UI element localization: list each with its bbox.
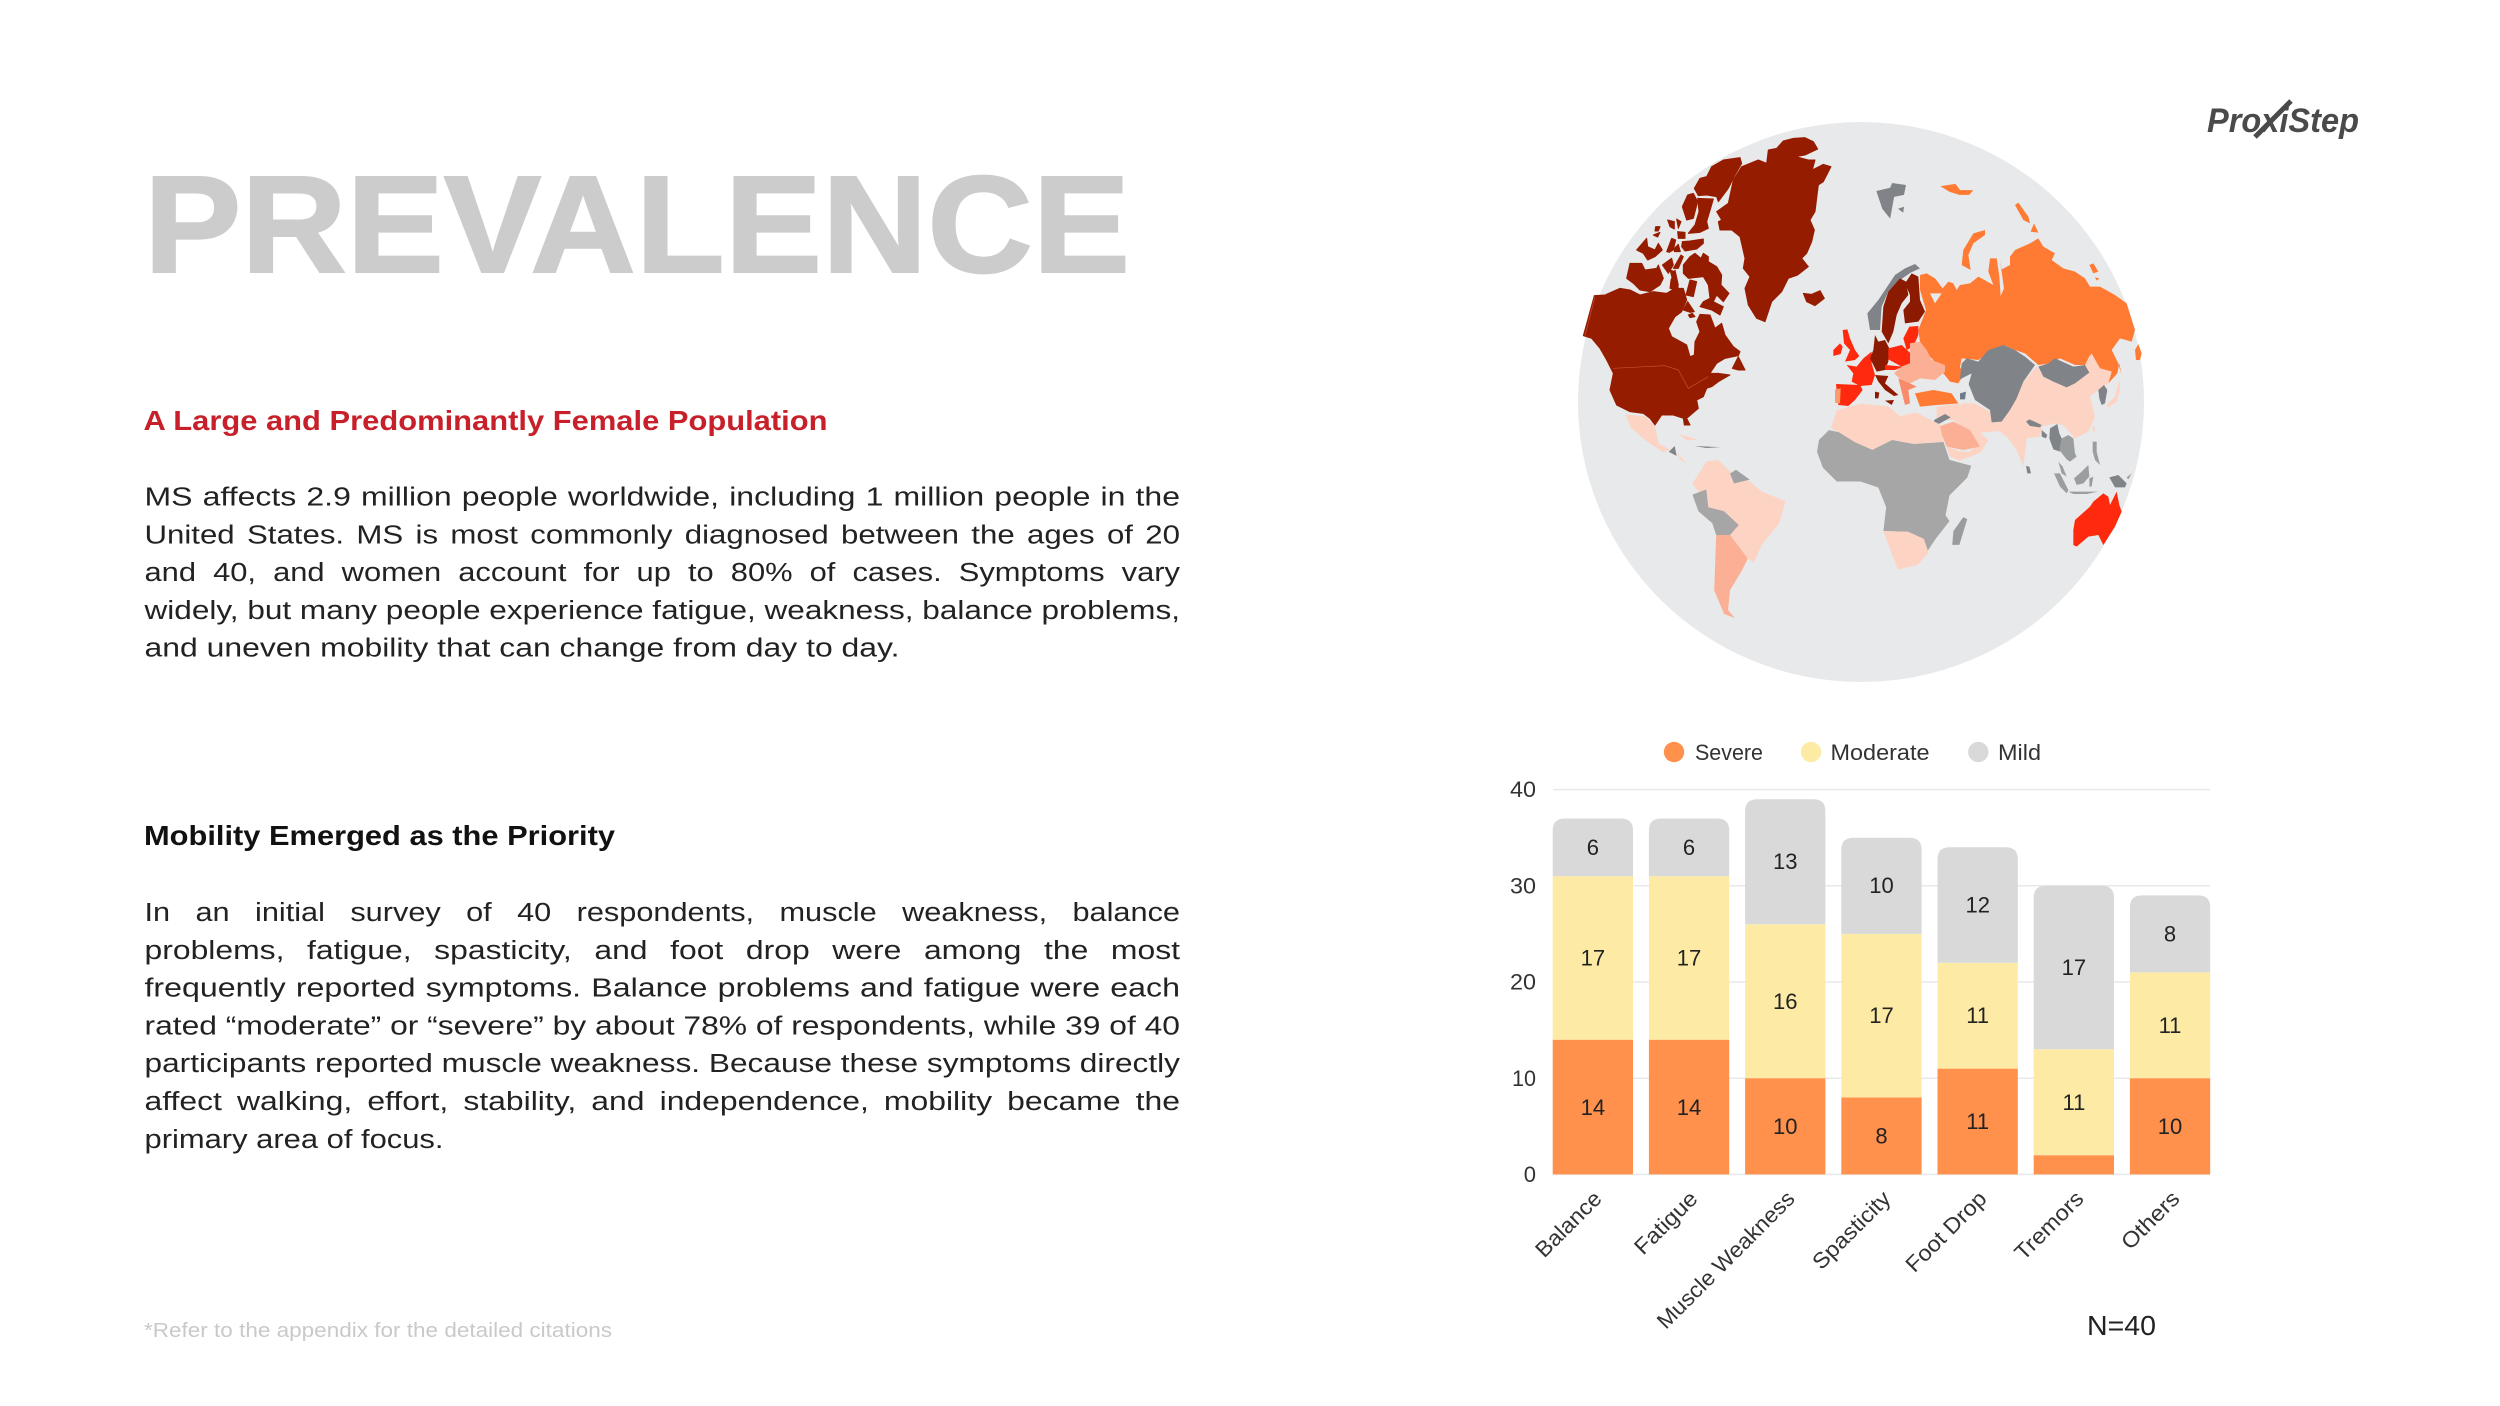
map: Europe xyxy=(1833,264,1958,407)
paragraph: survey findings: problems, fatigue, spasticity, and foot drop were among the most xyxy=(144,937,1180,965)
bar value labels: 11 xyxy=(1966,1109,1989,1134)
bar value labels: 13 xyxy=(1773,849,1798,874)
category labels: Foot Drop xyxy=(1900,1186,1992,1277)
paragraph: MS prevalence: and uneven mobility that can change from day to day. xyxy=(144,634,900,662)
bar value labels: 11 xyxy=(2062,1090,2085,1115)
y-axis labels: 10 xyxy=(1512,1066,1536,1091)
paragraph: survey findings: rated “moderate” or “severe” by about 78% of respondents, while 39 of 40 xyxy=(144,1012,1180,1040)
category labels: Muscle Weakness xyxy=(1652,1186,1800,1334)
paragraph: survey findings: participants reported muscle weakness. Because these symptoms directly xyxy=(144,1050,1180,1078)
paragraph: MS prevalence: widely, but many people experience fatigue, weakness, balance problems, xyxy=(143,597,1180,625)
bar: Spasticity xyxy=(1841,838,1922,1174)
bar value labels: 14 xyxy=(1581,1095,1605,1120)
stacked bar chart xyxy=(1510,777,2210,1334)
category labels: Tremors xyxy=(2009,1186,2089,1265)
paragraph: MS prevalence xyxy=(143,484,1180,662)
sample size note: N=40 xyxy=(2087,1310,2156,1341)
map: North America and Greenland xyxy=(1583,138,1831,425)
bar: Fatigue xyxy=(1649,818,1729,1174)
title: PREVALENCE xyxy=(144,148,1130,302)
paragraph: MS prevalence: United States. MS is most commonly diagnosed between the ages of 20 xyxy=(144,521,1180,549)
map globe background xyxy=(1578,122,2144,682)
bar value labels: 10 xyxy=(1773,1114,1798,1139)
category labels xyxy=(1530,1186,2185,1334)
y-axis labels xyxy=(1510,777,1536,1187)
paragraph: survey findings xyxy=(144,899,1180,1154)
bar value labels: 6 xyxy=(1683,835,1695,860)
category labels: Others xyxy=(2116,1186,2185,1254)
bar value labels: 17 xyxy=(1581,946,1605,970)
paragraph: MS prevalence: and 40, and women account for up to 80% of cases. Symptoms vary xyxy=(144,559,1180,587)
map: Central and East Asia xyxy=(1947,345,2120,467)
y-axis labels: 20 xyxy=(1510,970,1536,994)
bar value labels xyxy=(1581,835,2182,1148)
bar value labels: 11 xyxy=(1966,1003,1989,1028)
bar: Balance xyxy=(1553,818,1633,1174)
chart legend: Severe xyxy=(1695,740,1763,765)
map: Africa xyxy=(1817,404,1971,570)
footnote: *Refer to the appendix for the detailed citations xyxy=(144,1320,612,1342)
paragraph: survey findings: In an initial survey of 40 respondents, muscle weakness, balance xyxy=(144,899,1180,927)
chart legend: Moderate xyxy=(1830,740,1930,765)
paragraph: survey findings: affect walking, effort, stability, and independence, mobility became the xyxy=(144,1088,1180,1116)
chart axis and gridlines xyxy=(1553,790,2210,1174)
bar value labels: 14 xyxy=(1677,1095,1701,1120)
bar value labels: 12 xyxy=(1965,893,1990,918)
bar value labels: 10 xyxy=(2158,1114,2182,1139)
bar value labels: 17 xyxy=(1869,1003,1894,1028)
y-axis labels: 30 xyxy=(1510,874,1536,898)
bar value labels: 17 xyxy=(2062,955,2086,980)
bar: Tremors xyxy=(2034,886,2114,1174)
category labels: Balance xyxy=(1530,1186,1607,1262)
bar value labels: 6 xyxy=(1587,835,1599,860)
bar value labels: 16 xyxy=(1773,989,1798,1014)
world map xyxy=(1578,122,2144,682)
bar value labels: 8 xyxy=(1875,1124,1888,1148)
map: Middle East xyxy=(1934,404,2007,450)
y-axis labels: 0 xyxy=(1524,1162,1536,1187)
bar value labels: 17 xyxy=(1677,946,1701,970)
category labels: Fatigue xyxy=(1629,1186,1703,1259)
heading: mobility priority: Mobility Emerged as the Priority xyxy=(144,820,615,851)
map: Russia xyxy=(1918,238,2135,383)
y-axis labels: 40 xyxy=(1510,777,1536,802)
chart legend: Mild xyxy=(1998,740,2041,765)
paragraph: survey findings: frequently reported symptoms. Balance problems and fatigue were each xyxy=(144,975,1180,1003)
paragraph: MS prevalence: MS affects 2.9 million people worldwide, including 1 million people in the xyxy=(144,484,1180,512)
paragraph: survey findings: primary area of focus. xyxy=(144,1126,444,1154)
map: Svalbard and Franz Josef Land xyxy=(1876,183,1973,219)
bar: Foot Drop xyxy=(1938,847,2018,1174)
bar value labels: 10 xyxy=(1869,873,1894,898)
map: Latin America xyxy=(1625,414,1785,618)
chart legend xyxy=(1664,740,2041,765)
heading: female population: A Large and Predominantly Female Population xyxy=(144,405,827,436)
map: Arctic islands and Kamchatka xyxy=(1962,203,2142,360)
category labels: Spasticity xyxy=(1807,1186,1896,1274)
bar value labels: 8 xyxy=(2164,922,2176,946)
bar value labels: 11 xyxy=(2159,1013,2181,1038)
map: Southeast Asia and Australia xyxy=(2026,419,2132,547)
logo: ProxiStep: ProxiStep xyxy=(2207,102,2359,140)
bar: Muscle Weakness xyxy=(1745,799,1825,1174)
bar: Others xyxy=(2130,895,2210,1174)
